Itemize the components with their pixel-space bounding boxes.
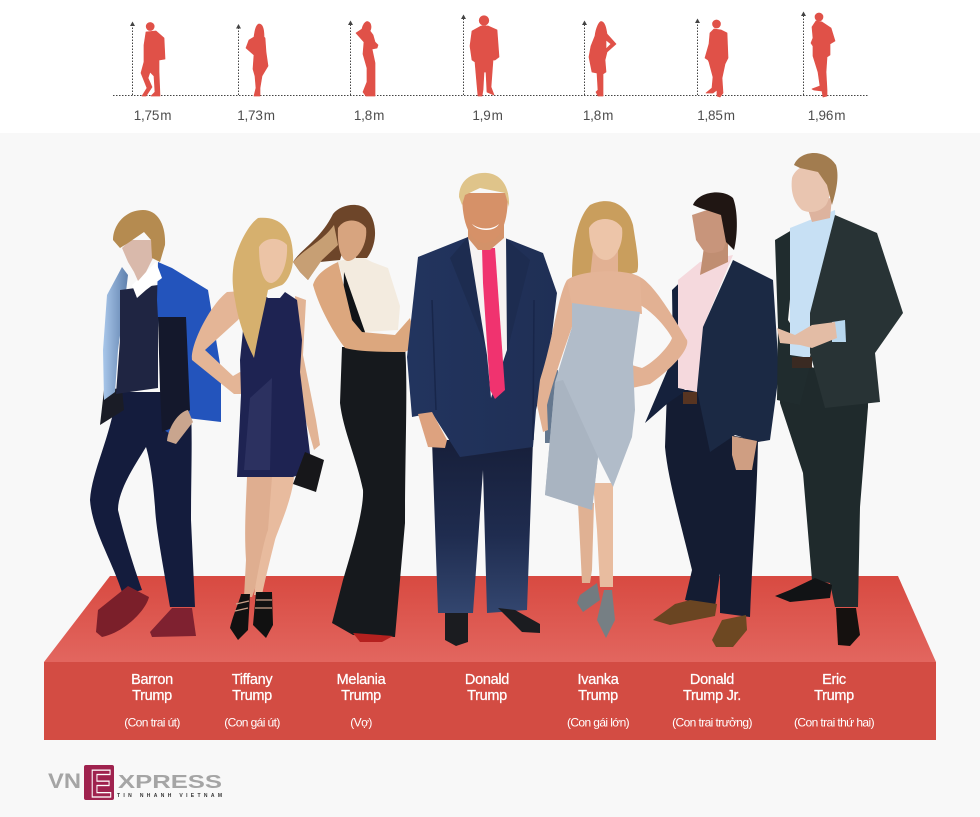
platform top [44,576,936,662]
logo: VnExpress: XPRESS [118,772,222,792]
height marker: Melania 1,8 m: 1,8 m [354,108,384,123]
height marker: Donald 1,9 m: 1,9 m [472,108,503,123]
logo: VnExpress: TIN NHANH VIETNAM [117,793,222,799]
height marker: Ivanka 1,8 m: 1,8 m [583,108,613,123]
label: Melania: Melania [337,672,387,688]
label: Tiffany: Tiffany [232,672,273,688]
figure: Donald Trump Jr. [645,192,779,647]
label: Barron: (Con trai út) [124,716,180,730]
logo: VnExpress: VN [48,770,81,793]
label: Barron: Barron [131,672,173,688]
label: Tiffany [224,672,280,730]
label: Melania [337,672,387,730]
label: Ivanka: Ivanka [578,672,620,688]
platform front with names [44,662,936,740]
label: Barron [124,672,180,730]
label: Donald Jr: (Con trai trưởng) [672,716,752,730]
label: Eric: Eric [822,672,846,688]
height marker: Melania 1,8 m [348,20,384,123]
height marker: Donald 1,9 m [461,14,503,123]
label: Donald Jr [672,672,752,730]
height marker: Eric 1,96 m: 1,96 m [808,108,845,123]
label: Donald [465,672,509,704]
logo: VnExpress: E [90,763,112,806]
label: Tiffany: (Con gái út) [224,716,280,730]
label: Melania: Trump [341,688,381,704]
height marker: Donald Jr 1,85 m [695,18,735,123]
figure: Ivanka Trump [537,201,687,638]
figure: Eric Trump [775,153,903,646]
label: Ivanka: Trump [578,688,618,704]
figure: Tiffany Trump [192,218,324,640]
height marker: Donald Jr 1,85 m: 1,85 m [697,108,735,123]
height marker: Barron 1,75 m: 1,75 m [134,108,171,123]
label: Ivanka [567,672,630,730]
label: Eric: Trump [814,688,854,704]
height marker: Ivanka 1,8 m [582,20,616,123]
height marker: Tiffany 1,73 m [236,24,275,123]
label: Melania: (Vợ) [350,716,372,730]
figure: Melania Trump [293,205,418,642]
height marker: Barron 1,75 m [130,22,171,123]
label: Donald: Donald [465,672,509,688]
label: Donald: Trump [467,688,507,704]
label: Donald Jr: Trump Jr. [683,688,741,704]
label: Ivanka: (Con gái lớn) [567,716,630,730]
height marker: Eric 1,96 m [801,12,845,123]
logo: VnExpress [48,763,222,806]
label: Tiffany: Trump [232,688,272,704]
figure: Donald Trump [407,173,557,646]
height chart: silhouettes with height arrows [113,12,868,123]
label: Barron: Trump [132,688,172,704]
label: Eric [794,672,875,730]
label: Donald Jr: Donald [690,672,734,688]
height marker: Tiffany 1,73 m: 1,73 m [237,108,275,123]
figure: Barron Trump [90,210,221,637]
label: Eric: (Con trai thứ hai) [794,716,875,730]
